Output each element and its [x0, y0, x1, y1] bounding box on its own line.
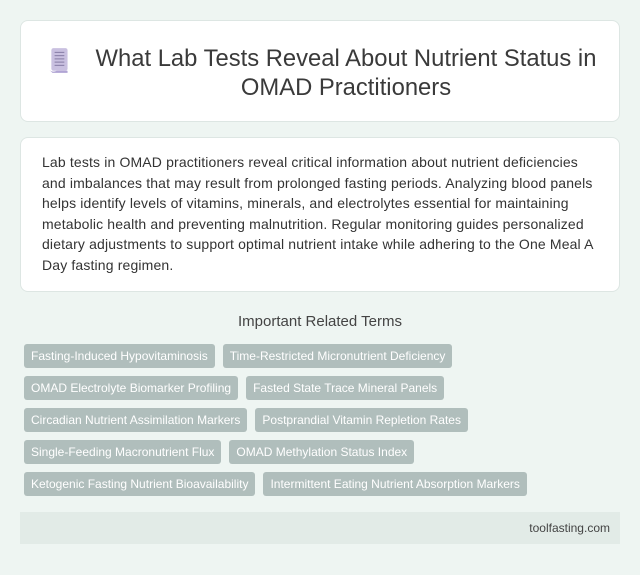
header card	[20, 20, 620, 122]
related terms tags: Intermittent Eating Nutrient Absorption Markers	[270, 477, 520, 491]
footer source: toolfasting.com	[529, 521, 610, 535]
icon: receipt	[50, 48, 68, 73]
description text: Lab tests in OMAD practitioners reveal critical information about nutrient deficiencies and imbalances that may result from prolonged fasting periods. Analyzing blood panels helps identify levels of vitamins, minerals, and electrolytes essential for maintaining metabolic health and preventing malnutrition. Regular monitoring guides personalized dietary adjustments to support optimal nutrient intake while adhering to the One Meal A Day fasting regimen.	[42, 154, 593, 272]
related terms tags: OMAD Methylation Status Index	[236, 445, 407, 459]
related terms tags: Ketogenic Fasting Nutrient Bioavailability	[31, 477, 248, 491]
related terms tags: Time-Restricted Micronutrient Deficiency	[230, 349, 445, 363]
related terms heading: Important Related Terms	[238, 313, 402, 330]
related terms tags: Fasting-Induced Hypovitaminosis	[31, 349, 208, 363]
related terms tags: Postprandial Vitamin Repletion Rates	[262, 413, 461, 427]
related terms tags: Fasted State Trace Mineral Panels	[253, 381, 437, 395]
description card	[20, 137, 620, 292]
related terms tags: Single-Feeding Macronutrient Flux	[31, 445, 214, 459]
related terms tags: Circadian Nutrient Assimilation Markers	[31, 413, 240, 427]
title: What Lab Tests Reveal About Nutrient Status in OMAD Practitioners	[96, 45, 596, 101]
related terms tags: OMAD Electrolyte Biomarker Profiling	[31, 381, 231, 395]
footer	[20, 512, 620, 544]
